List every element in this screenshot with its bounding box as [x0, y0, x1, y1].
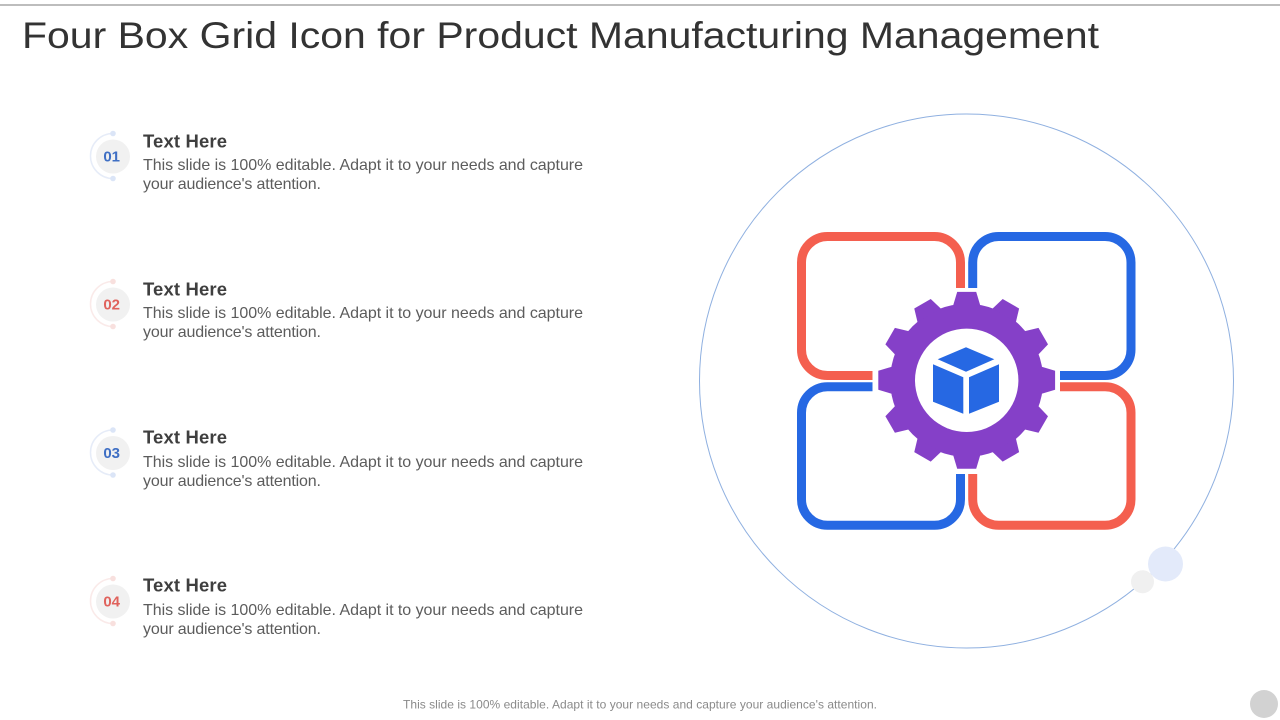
body text 03: your audience's attention.	[143, 473, 321, 490]
body text 02: This slide is 100% editable. Adapt it to your needs and capture	[143, 305, 583, 322]
decorative gray dot	[1131, 570, 1154, 593]
body text 04: This slide is 100% editable. Adapt it to your needs and capture	[143, 602, 583, 619]
body text 03: This slide is 100% editable. Adapt it to your needs and capture	[143, 454, 583, 471]
heading 03: Text Here	[143, 427, 227, 448]
list item 04	[91, 575, 583, 638]
number badge 04	[91, 576, 130, 626]
icon: cube	[933, 347, 999, 414]
heading 04: Text Here	[143, 575, 227, 596]
body text 01: This slide is 100% editable. Adapt it to your needs and capture	[143, 157, 583, 174]
number badge 04: 04	[103, 594, 121, 611]
box: top left	[802, 236, 960, 376]
body text 01	[143, 157, 583, 193]
body text 03	[143, 454, 583, 490]
body text 04	[143, 602, 583, 638]
large outline circle	[700, 114, 1234, 648]
number badge 01	[91, 131, 130, 181]
icon: gear	[878, 292, 1055, 469]
decorative blue dot	[1148, 546, 1183, 582]
body text 01: your audience's attention.	[143, 176, 321, 193]
list item 02	[91, 279, 583, 341]
heading 02: Text Here	[143, 279, 227, 300]
list item 01	[91, 131, 583, 193]
body text 04: your audience's attention.	[143, 621, 321, 638]
list item 03	[91, 427, 583, 490]
footer note: This slide is 100% editable. Adapt it to your needs and capture your audience's attention.	[403, 698, 877, 712]
box: top right	[973, 236, 1131, 376]
number badge 02: 02	[103, 297, 120, 314]
number badge 03: 03	[103, 445, 120, 462]
number badge 03	[91, 427, 130, 478]
body text 02: your audience's attention.	[143, 324, 321, 341]
number badge 01: 01	[103, 149, 120, 166]
number badge 02	[91, 279, 130, 329]
page number dot	[1250, 690, 1278, 718]
four box grid icon	[802, 236, 1131, 525]
body text 02	[143, 305, 583, 341]
box: bottom right	[973, 387, 1131, 525]
title: Four Box Grid Icon for Product Manufacturing Management	[22, 15, 1100, 56]
box: bottom left	[802, 387, 960, 525]
heading 01: Text Here	[143, 131, 227, 152]
